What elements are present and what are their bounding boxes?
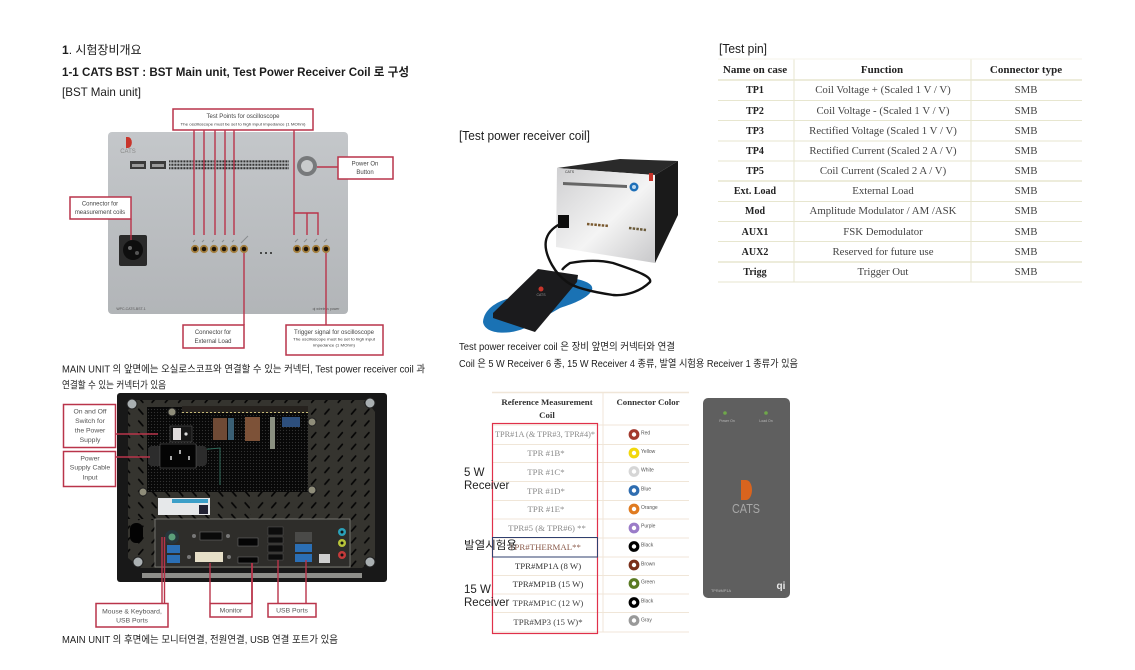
text block: front description: 연결할 수 있는 커넥터가 있음 (62, 380, 166, 392)
callout lines: rear view (116, 434, 306, 603)
row AUX2: AUX2 (742, 247, 768, 258)
row Trigg: Trigger Out (858, 266, 908, 278)
callout: test points: Test Points for oscilloscope (206, 114, 280, 120)
coil names (495, 429, 595, 627)
table header: Reference Measurement (501, 397, 593, 407)
indicator LEDs (719, 411, 773, 423)
ventilation grill (169, 160, 289, 170)
footer marks (116, 307, 340, 311)
connector colour names: Blue (641, 486, 651, 492)
internal wires (198, 417, 300, 485)
chassis screws (127, 398, 375, 567)
table header: Function (861, 64, 903, 76)
illustration: unit with receiver coil (483, 159, 678, 333)
coil names: TPR#THERMAL** (509, 542, 581, 552)
row TP1: Coil Voltage + (Scaled 1 V / V) (815, 84, 951, 96)
title: section heading: 1. 시험장비개요 (62, 43, 142, 57)
footer marks: qi wireless power (313, 307, 340, 311)
callout: power cable input (64, 452, 116, 486)
row Trigg: Trigg (743, 267, 767, 278)
coil names: TPR #1D* (527, 486, 565, 496)
callout: mouse keyboard USB: Mouse & Keyboard, (102, 608, 162, 616)
callout: USB ports: USB Ports (276, 608, 308, 614)
callout: power switch: Switch for (75, 418, 106, 425)
callout: external load connector: External Load (194, 339, 232, 345)
text block: front description: MAIN UNIT 의 앞면에는 오실로스코프와 연결할 수 있는 커넥터, Test power receiver coil 과 (62, 364, 425, 376)
callout: monitor: Monitor (220, 608, 243, 614)
label: 15 W Receiver: Receiver (464, 597, 510, 609)
heading: CATS BST composition: 1-1 CATS BST : BST Main unit, Test Power Receiver Coil 로 구성 (62, 65, 409, 79)
callout: test points (173, 109, 313, 130)
unit front face (556, 168, 655, 263)
icon: CATS logo (732, 480, 760, 516)
row TP5 (746, 165, 1037, 177)
callout: trigger signal (286, 325, 383, 355)
row Ext. Load: Ext. Load (734, 186, 777, 197)
text block: coil description: Coil 은 5 W Receiver 6 종, 15 W Receiver 4 종류, 발열 시험용 Receiver 1 종류가 있음 (459, 358, 798, 370)
callout lines: front view (131, 130, 338, 325)
table header: Coil (539, 410, 555, 420)
callout: mouse keyboard USB (96, 604, 168, 627)
front face details: CATS (565, 170, 575, 174)
receiver logo: CATS (536, 293, 546, 297)
row AUX1: AUX1 (742, 227, 768, 238)
row AUX1: SMB (1015, 226, 1037, 238)
callout: measurement coils connector (70, 197, 131, 219)
label: 15 W Receiver: 15 W (464, 584, 491, 596)
callout: measurement coils connector: measurement coils (75, 210, 125, 216)
row TP1: SMB (1015, 84, 1037, 96)
connector colour names: Purple (641, 524, 656, 530)
coil names: TPR#MP1C (12 W) (513, 598, 583, 608)
row Trigg: SMB (1015, 266, 1037, 278)
callout: power cable input: Power (80, 456, 100, 462)
callout: external load connector: Connector for (195, 330, 231, 336)
callout: power on button: Power On (352, 162, 378, 168)
table header: Connector Color (616, 397, 680, 407)
icon: power button (297, 156, 317, 176)
coil names: TPR#5 (& TPR#6) ** (508, 523, 586, 533)
fan grill (147, 407, 308, 492)
row TP2: SMB (1015, 105, 1037, 117)
front panel body (108, 132, 348, 314)
row TP3 (746, 125, 1037, 137)
connector colour names: Brown (641, 562, 655, 568)
row TP3: Rectified Voltage (Scaled 1 V / V) (809, 125, 957, 137)
callout: trigger signal: impedance (1 MOhm) (313, 344, 355, 348)
coil names: TPR #1E* (528, 504, 564, 514)
receiver coil body (493, 269, 578, 332)
icon: CATS logo (120, 137, 136, 155)
row Mod (745, 205, 1037, 217)
connector colour names: Gray (641, 618, 652, 624)
row TP4: SMB (1015, 145, 1037, 157)
rear chassis (117, 393, 387, 582)
card bracket strip (182, 406, 308, 413)
panel: main unit front view (108, 132, 348, 314)
connector colour names (641, 430, 658, 624)
callout: power switch: On and Off (73, 408, 107, 416)
row TP5: TP5 (746, 166, 764, 177)
row TP4: Rectified Current (Scaled 2 A / V) (809, 145, 957, 157)
text block: coil description: Test power receiver coil 은 장비 앞면의 커넥터와 연결 (459, 341, 675, 353)
callout: power switch: the Power (75, 428, 106, 434)
sticker label (158, 498, 210, 515)
left slotted strip (128, 400, 250, 519)
row Mod: Amplitude Modulator / AM /ASK (810, 205, 957, 217)
coil names: TPR#1A (& TPR#3, TPR#4)* (495, 429, 595, 439)
coil names: TPR#MP1A (8 W) (515, 561, 581, 571)
table header (723, 64, 1062, 76)
table header: Connector type (990, 64, 1062, 76)
connector colour names: White (641, 468, 654, 474)
label: heat test: 발열시험용 (464, 539, 517, 552)
callout: trigger signal: Trigger signal for oscilloscope (294, 330, 375, 336)
coil names: TPR#MP1B (15 W) (513, 579, 583, 589)
connector colour names: Black (641, 598, 654, 604)
row AUX1: FSK Demodulator (843, 226, 923, 238)
cable (546, 224, 650, 295)
row Mod: Mod (745, 206, 765, 217)
coil names: TPR #1B* (527, 448, 565, 458)
row TP3: SMB (1015, 125, 1037, 137)
text block: front description (62, 364, 425, 392)
SMB connectors (192, 246, 329, 252)
icon: qi mark: qi (777, 581, 786, 592)
callout: test points: The oscilloscope must be set to high input impedance (1 MOhm) (180, 122, 306, 126)
row AUX2 (742, 246, 1037, 258)
bottom rail (142, 573, 362, 578)
row Ext. Load: SMB (1015, 185, 1037, 197)
footer marks: WPC-CATS-BST-1 (116, 307, 146, 311)
connector colour names: Orange (641, 505, 658, 511)
row AUX1 (742, 226, 1037, 238)
unit top and side (557, 159, 678, 175)
indicator LEDs: Power On (719, 419, 735, 423)
panel: receiver coil device (703, 398, 790, 598)
blue pad (483, 278, 592, 333)
row TP2: TP2 (746, 106, 764, 117)
callout: mouse keyboard USB: USB Ports (116, 618, 148, 624)
connector colour names: Red (641, 430, 650, 436)
label: 5 W Receiver: Receiver (464, 480, 510, 492)
label: 5 W Receiver: 5 W (464, 467, 485, 479)
indicator LEDs: Load On (759, 419, 773, 423)
icon: CATS logo: CATS (120, 149, 136, 155)
row TP5: Coil Current (Scaled 2 A / V) (820, 165, 947, 177)
I/O back panel (155, 519, 350, 567)
row Ext. Load: External Load (852, 185, 914, 197)
connector colour names: Green (641, 580, 655, 586)
text block: coil description (459, 341, 798, 370)
coil names: TPR#MP3 (15 W)* (513, 617, 583, 627)
red frames: receiver groups (492, 424, 598, 634)
row TP1: TP1 (746, 85, 764, 96)
ellipsis dots (260, 252, 272, 254)
callout: measurement coils connector: Connector for (82, 202, 118, 208)
label: 5 W Receiver (464, 467, 510, 492)
callout: power switch (64, 404, 116, 448)
row TP3: TP3 (746, 126, 764, 137)
power switch (170, 426, 192, 442)
callout: external load connector (183, 325, 244, 348)
measurement coil connector (119, 235, 147, 266)
coil names: TPR #1C* (527, 467, 565, 477)
front face details (558, 170, 653, 230)
inner screws (139, 408, 316, 496)
connector colour names: Yellow (641, 449, 656, 455)
row TP2: Coil Voltage - (Scaled 1 V / V) (816, 105, 950, 117)
device id: TPR#MP1A (711, 589, 731, 593)
callout: power on button: Button (356, 170, 374, 176)
table: reference measurement coil (492, 392, 689, 632)
row TP5: SMB (1015, 165, 1037, 177)
callout: power cable input: Supply Cable (70, 464, 110, 472)
row Trigg (743, 266, 1037, 278)
row AUX2: Reserved for future use (832, 246, 934, 258)
row Ext. Load (734, 185, 1037, 197)
heading: test power receiver coil: [Test power receiver coil] (459, 129, 590, 143)
callout: trigger signal: The oscilloscope must be set to high input (293, 338, 375, 342)
text block: rear description: MAIN UNIT 의 후면에는 모니터연결, 전원연결, USB 연결 포트가 있음 (62, 634, 338, 646)
icon: CATS logo: CATS (732, 501, 760, 516)
label: 15 W Receiver (464, 584, 510, 609)
table header (501, 397, 680, 420)
connector colour swatches (630, 431, 638, 624)
panel: main unit rear view (117, 393, 387, 582)
callout: USB ports (268, 604, 316, 617)
callout: monitor (210, 604, 252, 617)
callout: power switch: Supply (80, 437, 101, 444)
callout: power on button (338, 157, 393, 179)
row TP4: TP4 (746, 146, 764, 157)
row AUX2: SMB (1015, 246, 1037, 258)
row TP1 (746, 84, 1037, 96)
callout: power cable input: Input (82, 474, 98, 482)
heading: BST Main unit: [BST Main unit] (62, 85, 141, 99)
port label marks (193, 236, 327, 243)
slotted plate (128, 400, 375, 568)
power socket (148, 444, 207, 468)
connector colour names: Black (641, 542, 654, 548)
row Mod: SMB (1015, 205, 1037, 217)
USB ports (130, 161, 166, 169)
row TP4 (746, 145, 1037, 157)
table header: Name on case (723, 64, 787, 76)
rubber cable grommet (130, 523, 143, 543)
heading: test pin: [Test pin] (719, 42, 767, 56)
row TP2 (746, 105, 1037, 117)
table: test pin (718, 59, 1082, 282)
receiver logo (536, 286, 546, 297)
